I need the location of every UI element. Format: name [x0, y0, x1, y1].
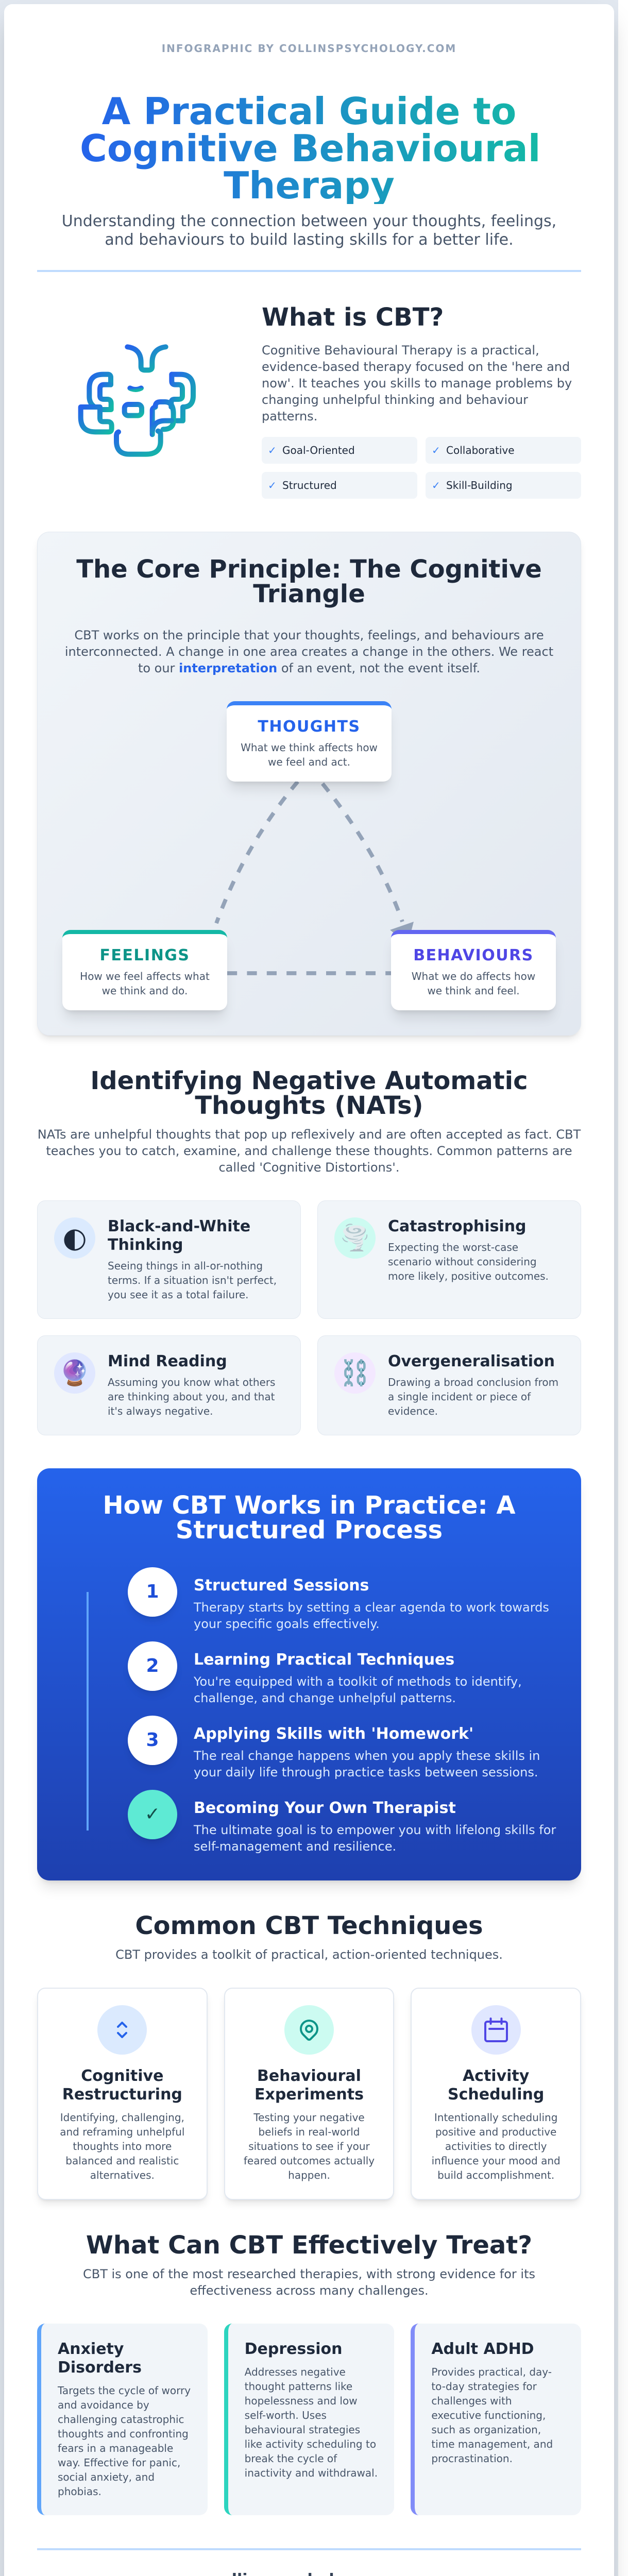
card: catastrophising [317, 1200, 581, 1319]
divider [37, 270, 581, 272]
step 2 number: 2 [146, 1655, 159, 1676]
text: core principle: to our interpretation of an event, not the event itself. [138, 661, 480, 675]
card: cognitive restructuring [37, 1988, 208, 2200]
icon: calendar [471, 2005, 521, 2055]
icon: brain [78, 344, 196, 457]
text: what is CBT: now'. It teaches you skills to manage problems by [262, 376, 572, 391]
card: depression: like activity scheduling to [245, 2438, 376, 2450]
heading: NATs: Identifying Negative Automatic [90, 1066, 528, 1095]
heading: NATs [90, 1066, 528, 1120]
card: black-and-white thinking: ◐ [62, 1222, 87, 1254]
chip: goal-oriented: ✓ [268, 444, 277, 456]
card: depression: inactivity and withdrawal. [245, 2467, 378, 2479]
panel: cognitive triangle [37, 532, 581, 1036]
card: catastrophising: more likely, positive outcomes. [388, 1270, 549, 1282]
text: core principle: CBT works on the principle that your thoughts, feelings, and behaviours are [74, 628, 544, 642]
card: anxiety disorders: Anxiety [58, 2340, 124, 2358]
card: cognitive restructuring: balanced and realistic [65, 2155, 179, 2167]
card: depression: break the cycle of [245, 2452, 337, 2465]
heading: core principle: Triangle [253, 580, 365, 608]
chip: structured: ✓ [268, 479, 277, 492]
card: activity scheduling: Scheduling [448, 2086, 544, 2104]
step 4 text: self-management and resilience. [194, 1839, 396, 1854]
box: feelings: FEELINGS [99, 946, 190, 964]
subtitle: Understanding the connection between your thoughts, feelings, [62, 212, 556, 230]
step 2 text: challenge, and change unhelpful patterns. [194, 1691, 456, 1705]
card: depression: hopelessness and low [245, 2395, 358, 2407]
card: anxiety disorders: fears in a manageable [58, 2442, 173, 2454]
step 3 heading: Applying Skills with 'Homework' [194, 1725, 473, 1743]
heading: what is CBT: What is CBT? [262, 303, 444, 332]
card: anxiety disorders: Disorders [58, 2359, 142, 2377]
step 3 text: your daily life through practice tasks between sessions. [194, 1765, 538, 1780]
step 3 text [194, 1749, 540, 1780]
step 2 number [128, 1641, 177, 1691]
divider [37, 2548, 581, 2550]
heading: core principle: The Core Principle: The Cognitive [76, 555, 542, 584]
text: what can CBT treat: effectiveness across many challenges. [190, 2283, 429, 2298]
heading: NATs: Thoughts (NATs) [195, 1091, 423, 1120]
step 3 number: 3 [146, 1730, 159, 1751]
subtitle: and behaviours to build lasting skills for a better life. [105, 231, 514, 249]
heading: process [103, 1491, 516, 1545]
card: overgeneralisation: ⛓️ [340, 1359, 370, 1387]
card: overgeneralisation: Overgeneralisation [388, 1352, 555, 1370]
card: behavioural experiments: feared outcomes actually [244, 2155, 375, 2167]
chip: goal-oriented: Goal-Oriented [282, 444, 355, 456]
card: mind reading: are thinking about you, and that [108, 1391, 275, 1403]
box: feelings: How we feel affects what [80, 970, 210, 982]
heading: core principle [76, 555, 542, 608]
chip: skill-building: ✓ [432, 479, 440, 492]
card: cognitive restructuring: thoughts into more [73, 2140, 172, 2153]
box: behaviours [391, 930, 556, 1010]
chip: skill-building: Skill-Building [446, 479, 513, 492]
panel: process [37, 1468, 581, 1880]
heading: what can CBT treat: What Can CBT Effectively Treat? [86, 2231, 532, 2260]
card: cognitive restructuring: and reframing unhelpful [60, 2126, 184, 2138]
text: what is CBT: changing unhelpful thinking and behaviour [262, 393, 528, 407]
heading: techniques: Common CBT Techniques [135, 1911, 483, 1940]
text: what is CBT [262, 343, 572, 423]
text: NATs [38, 1127, 581, 1175]
step 4 heading: Becoming Your Own Therapist [194, 1799, 456, 1817]
card: adult ADHD: executive functioning, [431, 2409, 546, 2421]
card: depression: self-worth. Uses [245, 2409, 327, 2421]
step 2 text [194, 1674, 522, 1705]
triangle connectors [214, 782, 414, 975]
box: thoughts: we feel and act. [268, 756, 350, 768]
title: A Practical Guide to [102, 90, 516, 133]
text: what is CBT: evidence-based therapy focused on the 'here and [262, 360, 570, 374]
step 4 check: ✓ [145, 1804, 160, 1825]
box: thoughts: THOUGHTS [258, 718, 361, 736]
chip: structured: Structured [282, 479, 337, 492]
card: adult ADHD: Provides practical, day- [431, 2366, 552, 2378]
box: behaviours: we think and feel. [427, 985, 520, 997]
box: behaviours: What we do affects how [412, 970, 535, 982]
card: black-and-white thinking: Thinking [108, 1236, 183, 1254]
step 4 text: The ultimate goal is to empower you with lifelong skills for [194, 1823, 556, 1837]
step 1 text: Therapy starts by setting a clear agenda to work towards [194, 1600, 549, 1615]
step 1 text [194, 1600, 549, 1631]
card: behavioural experiments: Testing your negative [253, 2111, 365, 2124]
card: activity scheduling: activities to directly [445, 2140, 547, 2153]
card: overgeneralisation: Drawing a broad conclusion from [388, 1376, 558, 1388]
card: adult ADHD: time management, and [431, 2438, 553, 2450]
chip: skill-building [426, 472, 581, 499]
step 4 check [128, 1790, 177, 1839]
title [80, 93, 538, 204]
card: anxiety disorders: social anxiety, and [58, 2471, 155, 2483]
card: overgeneralisation: evidence. [388, 1405, 438, 1417]
card: adult ADHD: challenges with [431, 2395, 512, 2407]
card: anxiety disorders [37, 2324, 208, 2515]
card: black-and-white thinking: you see it as a total failure. [108, 1289, 249, 1301]
step 2 text: You're equipped with a toolkit of methods to identify, [194, 1674, 522, 1689]
step 2 heading: Learning Practical Techniques [194, 1651, 454, 1669]
heading: process: How CBT Works in Practice: A [103, 1491, 516, 1520]
card: activity scheduling: influence your mood and [432, 2155, 561, 2167]
text: core principle: interconnected. A change in one area creates a change in the others. We react [65, 645, 553, 659]
chip: structured [262, 472, 417, 499]
step 3 text: The real change happens when you apply these skills in [194, 1749, 540, 1763]
text: NATs: NATs are unhelpful thoughts that pop up reflexively and are often accepted as fact. CBT [38, 1127, 581, 1142]
card: mind reading: 🔮 [59, 1359, 90, 1387]
card: behavioural experiments: Behavioural [257, 2067, 361, 2085]
card: anxiety disorders: Targets the cycle of worry [58, 2384, 191, 2397]
card: activity scheduling [411, 1988, 581, 2200]
box: thoughts: What we think affects how [241, 741, 378, 754]
step 1 number: 1 [146, 1581, 159, 1602]
card: activity scheduling: Activity [463, 2067, 529, 2085]
card: cognitive restructuring: Identifying, challenging, [60, 2111, 184, 2124]
card: behavioural experiments: beliefs in real-world [258, 2126, 360, 2138]
icon: location pin [284, 2005, 334, 2055]
card: cognitive restructuring: alternatives. [90, 2169, 155, 2181]
card: anxiety disorders: phobias. [58, 2485, 101, 2498]
timeline line [87, 1592, 89, 1831]
card: overgeneralisation: a single incident or piece of [388, 1391, 531, 1403]
step 1 number [128, 1567, 177, 1617]
text: techniques: CBT provides a toolkit of practical, action-oriented techniques. [115, 1947, 503, 1962]
card: black-and-white thinking [37, 1200, 301, 1319]
card: anxiety disorders: and avoidance by [58, 2399, 149, 2411]
card: behavioural experiments: happen. [288, 2169, 330, 2181]
card: mind reading: Mind Reading [108, 1352, 227, 1370]
card: black-and-white thinking: Black-and-White [108, 1217, 250, 1235]
card: adult ADHD: Adult ADHD [431, 2340, 534, 2358]
card: depression: thought patterns like [245, 2380, 352, 2393]
card: overgeneralisation [317, 1335, 581, 1435]
card: depression: behavioural strategies [245, 2424, 360, 2436]
card: depression [224, 2324, 394, 2515]
text: what is CBT: Cognitive Behavioural Therapy is a practical, [262, 343, 539, 358]
card: cognitive restructuring: Cognitive [81, 2067, 163, 2085]
card: activity scheduling: positive and productive [435, 2126, 556, 2138]
card: catastrophising: Catastrophising [388, 1217, 527, 1235]
icon: selector [97, 2005, 147, 2055]
box: feelings [62, 930, 227, 1010]
box: thoughts [227, 701, 392, 782]
card: depression: Addresses negative [245, 2366, 346, 2378]
text: core principle [65, 628, 553, 675]
card: catastrophising: Expecting the worst-case [388, 1241, 518, 1253]
card: black-and-white thinking: terms. If a situation isn't perfect, [108, 1274, 277, 1286]
box: feelings: we think and do. [102, 985, 188, 997]
chip: collaborative [426, 437, 581, 464]
card: black-and-white thinking: Seeing things in all-or-nothing [108, 1260, 263, 1272]
chip: collaborative: Collaborative [446, 444, 515, 456]
card: activity scheduling: build accomplishment. [437, 2169, 554, 2181]
text: what can CBT treat: CBT is one of the most researched therapies, with strong evidence for its [83, 2267, 535, 2281]
card: mind reading: it's always negative. [108, 1405, 213, 1417]
text: NATs: teaches you to catch, examine, and challenge these thoughts. Common patterns are [46, 1144, 572, 1158]
card: anxiety disorders: way. Effective for panic, [58, 2456, 180, 2469]
heading: process: Structured Process [176, 1516, 443, 1545]
card: catastrophising: scenario without considering [388, 1256, 537, 1268]
text: NATs: called 'Cognitive Distortions'. [218, 1160, 400, 1175]
step 1 text: your specific goals effectively. [194, 1617, 380, 1631]
chip: goal-oriented [262, 437, 417, 464]
step 4 text [194, 1823, 556, 1854]
card: behavioural experiments [224, 1988, 394, 2200]
card: depression: Depression [245, 2340, 342, 2358]
subtitle [62, 212, 556, 249]
card: anxiety disorders: thoughts and confronting [58, 2428, 189, 2440]
text: what is CBT: patterns. [262, 409, 317, 423]
card: adult ADHD: procrastination. [431, 2452, 513, 2465]
step 3 number [128, 1716, 177, 1765]
card: behavioural experiments: Experiments [254, 2086, 364, 2104]
step 1 heading: Structured Sessions [194, 1577, 369, 1595]
chip: collaborative: ✓ [432, 444, 440, 456]
kicker: INFOGRAPHIC BY COLLINSPSYCHOLOGY.COM [162, 42, 456, 55]
card: behavioural experiments: situations to see if your [248, 2140, 370, 2153]
text: what can CBT treat [83, 2267, 535, 2298]
card: anxiety disorders: challenging catastrophic [58, 2413, 184, 2426]
card: adult ADHD [411, 2324, 581, 2515]
card: mind reading [37, 1335, 301, 1435]
box: behaviours: BEHAVIOURS [413, 946, 534, 964]
card: cognitive restructuring: Restructuring [62, 2086, 182, 2104]
card: mind reading: Assuming you know what others [108, 1376, 275, 1388]
card: adult ADHD: to-day strategies for [431, 2380, 537, 2393]
card: activity scheduling: Intentionally scheduling [434, 2111, 557, 2124]
title: Cognitive Behavioural [80, 127, 540, 170]
card: adult ADHD: such as organization, [431, 2424, 541, 2436]
card: catastrophising: 🌪️ [340, 1224, 370, 1252]
title: Therapy [224, 164, 395, 207]
